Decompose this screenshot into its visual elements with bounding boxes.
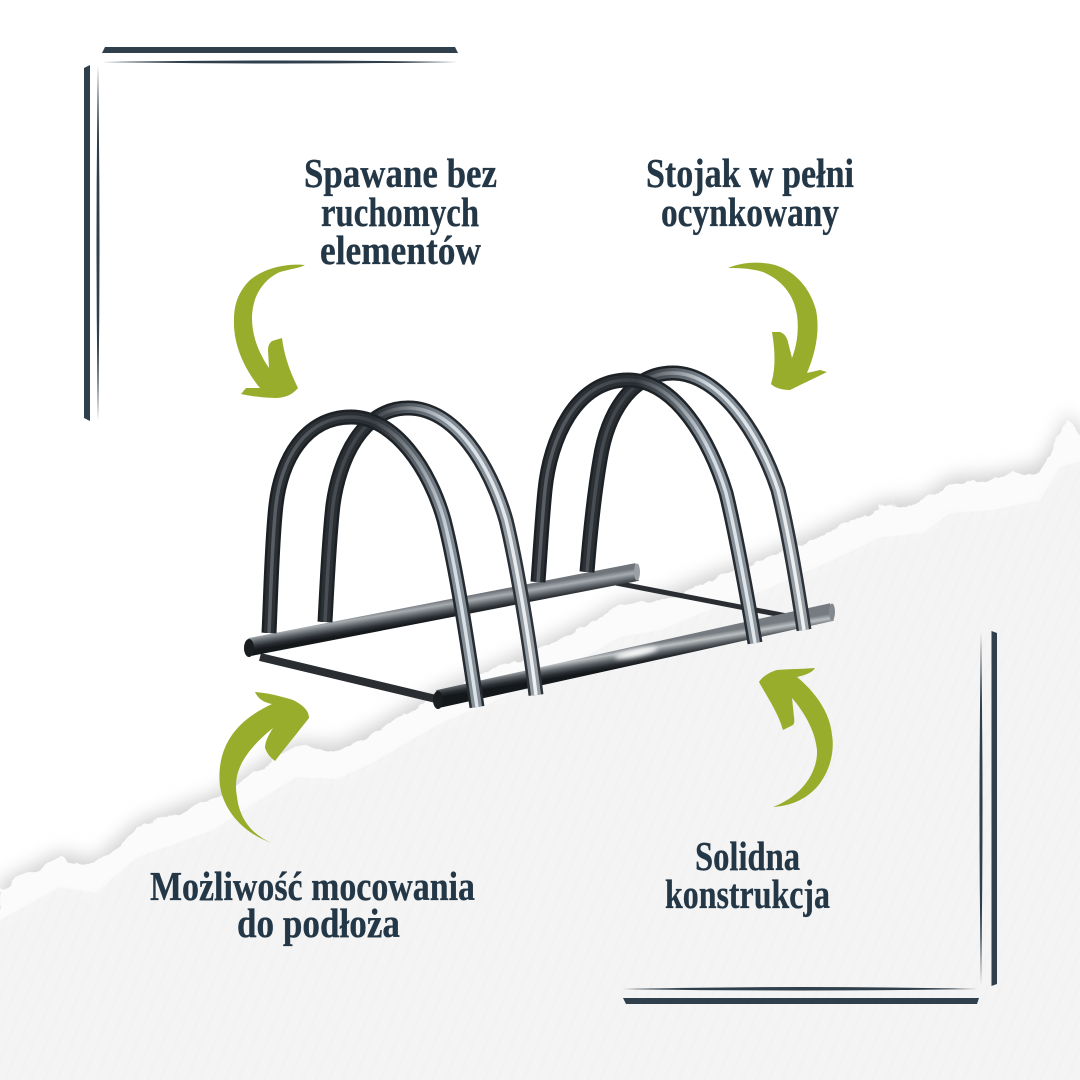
arch: rear of right pair xyxy=(587,373,804,630)
arch: front of right pair xyxy=(538,380,755,643)
arch: rear of left pair xyxy=(325,408,536,695)
torn paper background xyxy=(0,412,1080,1080)
mounting flat: left xyxy=(260,657,436,699)
heading: can be anchored to the ground xyxy=(150,863,475,946)
corner frame: bottom right xyxy=(623,631,997,1004)
heading: solid construction: konstrukcja xyxy=(665,871,830,917)
heading: fully galvanised xyxy=(646,150,854,235)
mounting flat: right xyxy=(616,583,792,617)
front ground bar xyxy=(433,604,835,709)
heading: can be anchored to the ground: do podłoża xyxy=(237,900,400,946)
heading: welded without moving parts xyxy=(304,150,497,273)
heading: welded without moving parts: elementów xyxy=(320,227,481,273)
back ground bar xyxy=(244,564,640,657)
heading: solid construction xyxy=(665,833,830,917)
arrow: top right xyxy=(728,263,827,390)
corner frame: top left xyxy=(84,47,458,421)
arrow: bottom right xyxy=(759,668,833,807)
arrow: bottom left xyxy=(219,692,309,843)
heading: fully galvanised: Stojak w pełni xyxy=(646,150,854,196)
heading: welded without moving parts: Spawane bez xyxy=(304,150,497,196)
heading: welded without moving parts: ruchomych xyxy=(321,189,479,235)
arrow: top left xyxy=(234,265,305,398)
heading: can be anchored to the ground: Możliwość mocowania xyxy=(150,863,475,909)
heading: solid construction: Solidna xyxy=(695,833,800,879)
heading: fully galvanised: ocynkowany xyxy=(661,189,839,235)
bike rack product xyxy=(244,373,835,709)
arch: front of left pair xyxy=(269,417,477,707)
